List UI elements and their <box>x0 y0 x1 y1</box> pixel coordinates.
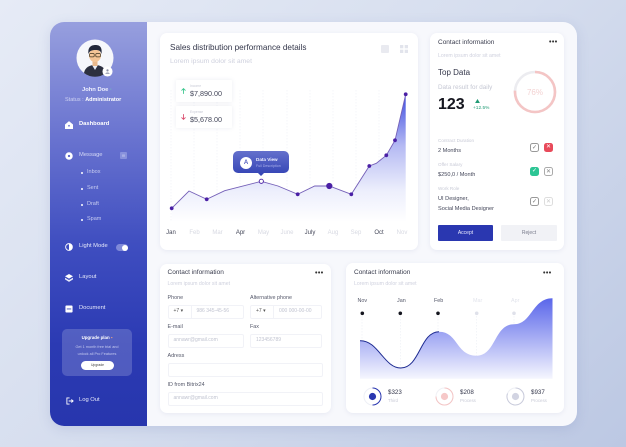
expense label: Expense <box>190 110 203 114</box>
nav: message <box>65 152 127 160</box>
data view tooltip: A <box>244 160 248 166</box>
form heading: Contact information <box>168 269 224 276</box>
income box <box>176 80 232 102</box>
message submenu: Draft <box>87 201 99 207</box>
nav: log out <box>66 397 100 404</box>
icon: list view <box>381 45 389 53</box>
stat: third <box>364 388 402 406</box>
donut 76%: 76% <box>527 88 543 97</box>
donut 76% <box>514 70 556 114</box>
card subtitle: Lorem ipsum dolor sit amet <box>438 53 501 59</box>
reject button: Reject <box>522 230 536 236</box>
field: fax: Fax <box>250 324 259 330</box>
month labels: Nov <box>358 298 367 304</box>
user name: John Doe · <box>82 87 112 93</box>
panel: sales chart <box>160 33 418 250</box>
upgrade heading: Upgrade plan ▪ <box>82 335 112 340</box>
upgrade button: Upgrade <box>91 363 104 367</box>
form subtitle: Lorem ipsum dolor sit amet <box>168 281 230 287</box>
x-axis months: Jan <box>166 230 176 236</box>
more menu: ••• <box>549 39 558 46</box>
expense box <box>176 106 232 128</box>
stat: third: Third <box>388 398 398 403</box>
field: id from bitrix24 <box>168 382 323 406</box>
work role row: Work Role <box>438 186 459 191</box>
card heading: Contact information <box>438 39 494 46</box>
field: address: Adress <box>168 353 184 359</box>
sidebar <box>50 22 147 426</box>
message submenu <box>81 169 101 222</box>
card heading: Contact information <box>354 269 410 276</box>
field: fax <box>250 324 322 348</box>
work role row: ✓ <box>532 199 537 205</box>
contract duration row: ✕ <box>546 144 551 150</box>
upgrade text: unlock all Pro Features <box>78 352 116 356</box>
work role row: UI Designer, <box>438 196 469 202</box>
accept button: Accept <box>458 230 473 236</box>
message submenu: Spam <box>87 216 101 222</box>
chart subtitle: Lorem ipsum dolor sit amet <box>170 58 252 65</box>
x-axis months: Oct <box>374 230 384 236</box>
upgrade text: Get 1 month free trial and <box>75 345 119 349</box>
dashboard window <box>50 22 577 426</box>
field: id from bitrix24: annawr@gmail.com <box>174 395 218 401</box>
big number: 123 <box>438 96 465 113</box>
avatar <box>76 40 114 77</box>
nav: layout <box>65 274 96 282</box>
data view tooltip: Full Description <box>256 164 281 168</box>
message submenu: Sent <box>87 185 98 191</box>
upgrade button <box>81 361 114 370</box>
field: e-mail: annawr@gmail.com <box>174 337 218 343</box>
stat: process 2: $937 <box>531 389 545 396</box>
contract duration row: ✓ <box>532 145 537 151</box>
card subtitle: Lorem ipsum dolor sit amet <box>354 281 417 287</box>
x-axis months: Mar <box>212 230 223 236</box>
nav: light mode <box>65 243 128 251</box>
offer salary row: ✓ <box>532 168 537 174</box>
field: address <box>168 353 323 377</box>
message submenu: Inbox <box>87 169 100 175</box>
income label: Income <box>190 84 201 88</box>
panel: top data <box>430 33 564 250</box>
field: alternative phone: Alternative phone <box>250 295 292 301</box>
month labels: Jan <box>397 298 406 304</box>
more menu: ••• <box>315 270 324 277</box>
x-axis months: Apr <box>236 230 245 236</box>
offer salary row <box>438 162 553 178</box>
top data heading: Top Data <box>438 68 470 77</box>
top data note: Data result for daily <box>438 84 492 91</box>
stat: process: Process <box>460 398 476 403</box>
x-axis months: May <box>258 230 269 236</box>
icon: grid view <box>400 45 408 53</box>
icon: down arrow <box>181 114 186 120</box>
panel: area chart <box>346 263 564 413</box>
field: e-mail: E-mail <box>168 324 183 330</box>
data view tooltip <box>233 151 289 176</box>
field: fax: 123456789 <box>256 337 281 343</box>
offer salary row: ✕ <box>546 169 551 175</box>
field: phone: +7 ▾ <box>174 308 183 314</box>
expense value: $5,678.00 <box>190 115 222 124</box>
month labels: Apr <box>511 298 519 304</box>
month labels: Feb <box>434 298 443 304</box>
work role row <box>438 186 553 212</box>
field: alternative phone: 000 000-00-00 <box>279 308 312 314</box>
data view tooltip: Data View <box>256 156 278 162</box>
chart title: Sales distribution performance details <box>170 43 307 52</box>
x-axis months: Sep <box>351 230 361 236</box>
field: id from bitrix24: ID from Bitrix24 <box>168 382 205 388</box>
nav: message: Message <box>79 152 103 158</box>
field: e-mail <box>168 324 244 348</box>
offer salary row: $250,0 / Month <box>438 172 475 178</box>
offer salary row: Offer Salary <box>438 162 462 167</box>
more menu: ••• <box>543 270 552 277</box>
x-axis months <box>166 230 408 236</box>
work role row: ✕ <box>546 199 551 205</box>
growth indicator: +12.5% <box>473 106 489 111</box>
stat: process: $208 <box>460 389 474 396</box>
field: alternative phone <box>250 295 322 319</box>
x-axis months: Aug <box>328 230 338 236</box>
x-axis months: Nov <box>397 230 407 236</box>
nav: document: Document <box>79 305 105 311</box>
nav: log out: Log Out <box>79 397 100 403</box>
work role row: Social Media Designer <box>438 206 494 212</box>
nav: dashboard <box>65 121 109 129</box>
field: phone: Phone <box>168 295 183 301</box>
nav: light mode: Light Mode <box>79 243 108 249</box>
field: phone <box>168 295 244 319</box>
x-axis months: July <box>305 230 315 236</box>
nav: dashboard: Dashboard <box>79 121 109 127</box>
field: alternative phone: +7 ▾ <box>256 308 266 314</box>
x-axis months: Feb <box>189 230 200 236</box>
upgrade plan box <box>62 329 132 376</box>
reject button <box>501 225 557 241</box>
upgrade text <box>75 345 119 356</box>
panel: contact form <box>160 264 331 413</box>
contract duration row: 2 Months <box>438 148 461 154</box>
stat: process 2 <box>506 388 547 406</box>
nav: layout: Layout <box>79 274 96 280</box>
growth indicator <box>473 99 490 111</box>
month labels: Mar <box>473 298 482 304</box>
contract duration row: Contract Duration <box>438 138 474 143</box>
income value: $7,890.00 <box>190 89 222 98</box>
month labels <box>358 298 520 304</box>
user status: Status : Administrator <box>65 97 121 103</box>
icon: up arrow <box>181 88 186 94</box>
stat: third: $323 <box>388 389 402 396</box>
nav: document <box>65 305 106 312</box>
x-axis months: June <box>280 230 294 236</box>
field: phone: 986 345-45-56 <box>196 308 229 314</box>
stat: process <box>436 388 476 406</box>
avatar badge <box>102 66 112 76</box>
stat: process 2: Process <box>531 398 547 403</box>
nav: message: !! <box>122 153 125 158</box>
accept button <box>438 225 493 241</box>
contract duration row <box>438 138 553 154</box>
